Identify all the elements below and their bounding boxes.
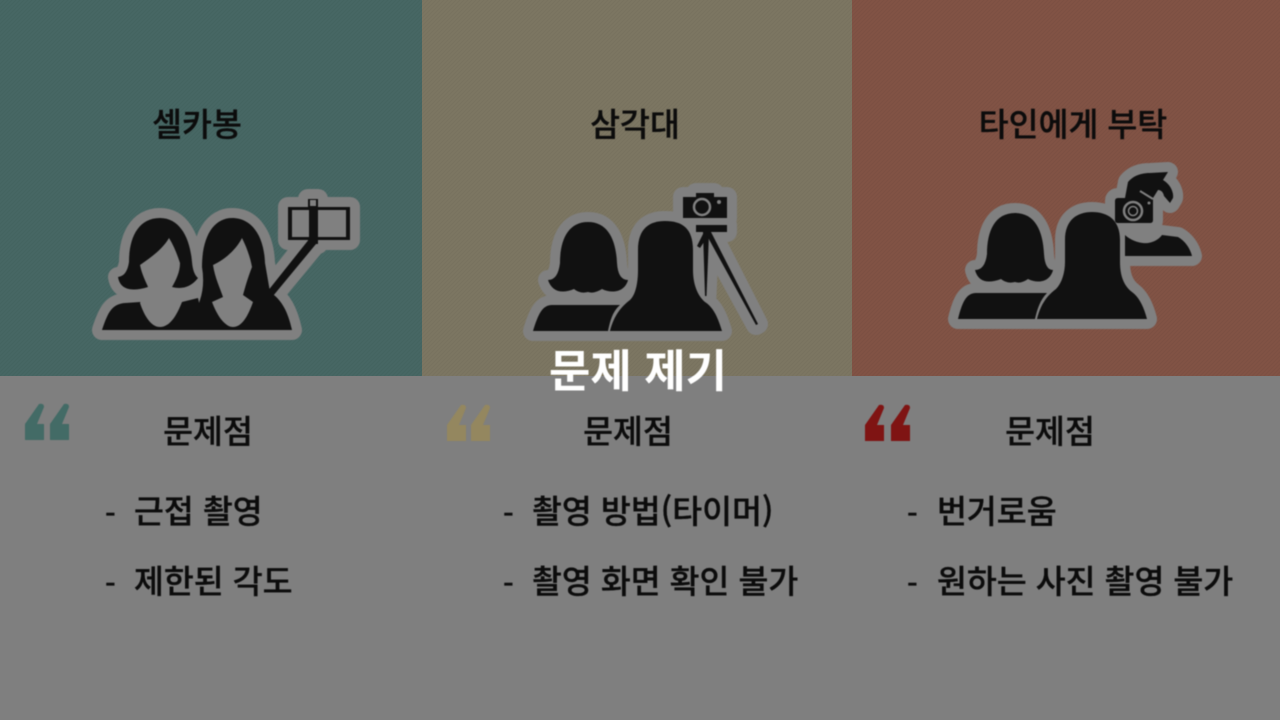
panel: asking others background: [852, 0, 1280, 376]
text block: selfie stick problems: [105, 494, 293, 600]
heading: problems 3: 문제점: [1005, 414, 1095, 450]
panel: tripod background: [422, 0, 852, 376]
title: 문제 제기: [549, 346, 727, 397]
heading: tripod: 삼각대: [590, 107, 680, 143]
text block: selfie stick problems: -: [105, 494, 116, 530]
text block: tripod problems: 촬영 화면 확인 불가: [532, 564, 798, 600]
heading: problems 1: 문제점: [163, 414, 253, 450]
text block: asking others problems: [907, 494, 1233, 600]
text block: selfie stick problems: 근접 촬영: [134, 494, 263, 530]
heading: asking others: 타인에게 부탁: [979, 107, 1167, 143]
text block: tripod problems: -: [503, 564, 514, 600]
icon: two women with photographer: [958, 172, 1192, 319]
icon: teal quote mark: [25, 404, 69, 440]
text block: tripod problems: [503, 486, 798, 600]
icon: red quote mark: [865, 405, 910, 441]
icon: two women with tripod camera: [533, 193, 758, 331]
text block: tripod problems: -: [503, 494, 514, 530]
icon: tan quote mark: [447, 405, 490, 441]
heading: problems 2: 문제점: [583, 414, 673, 450]
icon: two women with selfie stick: [102, 199, 350, 330]
text block: asking others problems: -: [907, 494, 918, 530]
text block: selfie stick problems: 제한된 각도: [134, 564, 293, 600]
text block: asking others problems: 번거로움: [937, 494, 1057, 530]
heading: selfie stick: 셀카봉: [152, 107, 242, 143]
panel: selfie stick background: [0, 0, 422, 376]
text block: selfie stick problems: -: [105, 564, 116, 600]
text block: asking others problems: 원하는 사진 촬영 불가: [937, 564, 1233, 600]
text block: asking others problems: -: [907, 564, 918, 600]
text block: tripod problems: 촬영 방법(타이머): [532, 486, 774, 533]
panel: problems background: [0, 376, 1280, 720]
